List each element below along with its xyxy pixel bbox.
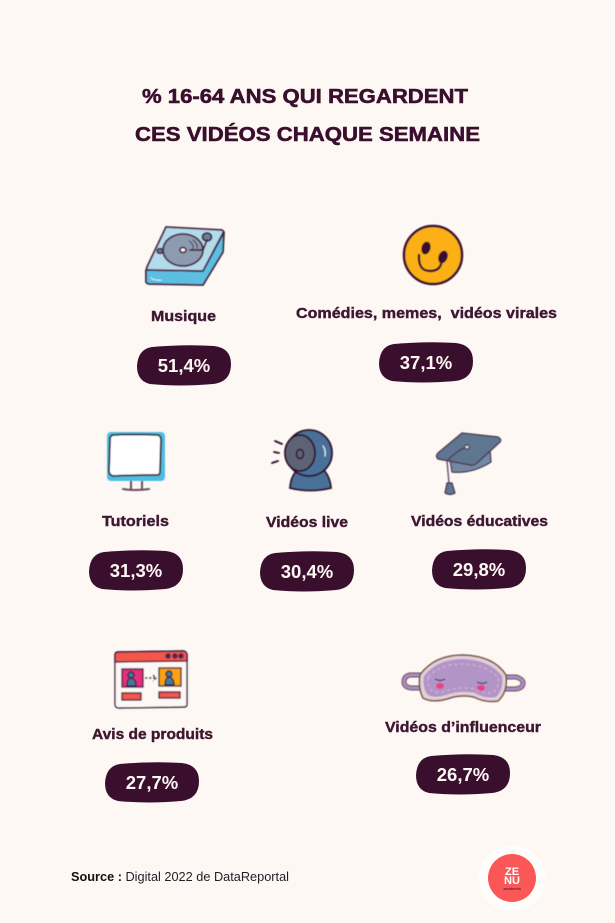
value: 37,1%: 37,1% (400, 352, 452, 373)
label: Tutoriels: Tutoriels (102, 514, 169, 530)
value: 26,7% (416, 754, 510, 794)
title: % 16-64 ANS QUI REGARDENT (142, 85, 469, 108)
label: Vidéos d'influenceur: Vidéos d’influenceur (385, 720, 541, 736)
label: Avis de produits: Avis de produits (92, 727, 213, 743)
icon: monitor (107, 432, 165, 490)
logo: Zenu: NU (504, 875, 520, 887)
icon: graduation cap (436, 433, 501, 494)
item: Vidéos d'influenceur (385, 655, 541, 794)
value: 37,1% (379, 342, 473, 382)
label: Musique: Musique (151, 309, 216, 325)
logo: Zenu: academia (503, 886, 521, 891)
item: Vidéos live (260, 430, 354, 592)
title (135, 85, 480, 146)
item: Comédies (296, 226, 557, 382)
item: Avis de produits (92, 651, 213, 802)
icon: sleep mask (404, 655, 523, 702)
icon: webcam (272, 430, 332, 490)
logo: Zenu (479, 845, 545, 911)
item: Tutoriels (89, 432, 183, 590)
value: 29,8% (432, 549, 526, 590)
value: 51,4% (137, 345, 231, 386)
icon: review window (115, 651, 187, 708)
icon: turntable (146, 227, 224, 285)
label: Vidéos éducatives: Vidéos éducatives (411, 514, 548, 530)
title: CES VIDÉOS CHAQUE SEMAINE (135, 123, 480, 146)
value: 30,4%: 30,4% (281, 561, 333, 582)
item: Musique (137, 227, 231, 386)
value: 30,4% (260, 551, 354, 592)
value: 29,8%: 29,8% (453, 559, 505, 580)
value: 31,3% (89, 550, 183, 590)
logo: Zenu: ZE (505, 866, 519, 878)
value: 51,4%: 51,4% (158, 355, 210, 376)
label: Comédies: Comédies, memes, vidéos virales (296, 306, 557, 322)
item: Vidéos éducatives (411, 433, 548, 590)
value: 31,3%: 31,3% (110, 560, 162, 581)
label: Vidéos live: Vidéos live (266, 515, 348, 531)
icon: smiley (404, 226, 462, 284)
source: Source : Digital 2022 de DataReportal (71, 870, 289, 884)
value: 27,7%: 27,7% (126, 772, 178, 793)
value: 27,7% (105, 762, 199, 802)
value: 26,7%: 26,7% (437, 764, 489, 785)
